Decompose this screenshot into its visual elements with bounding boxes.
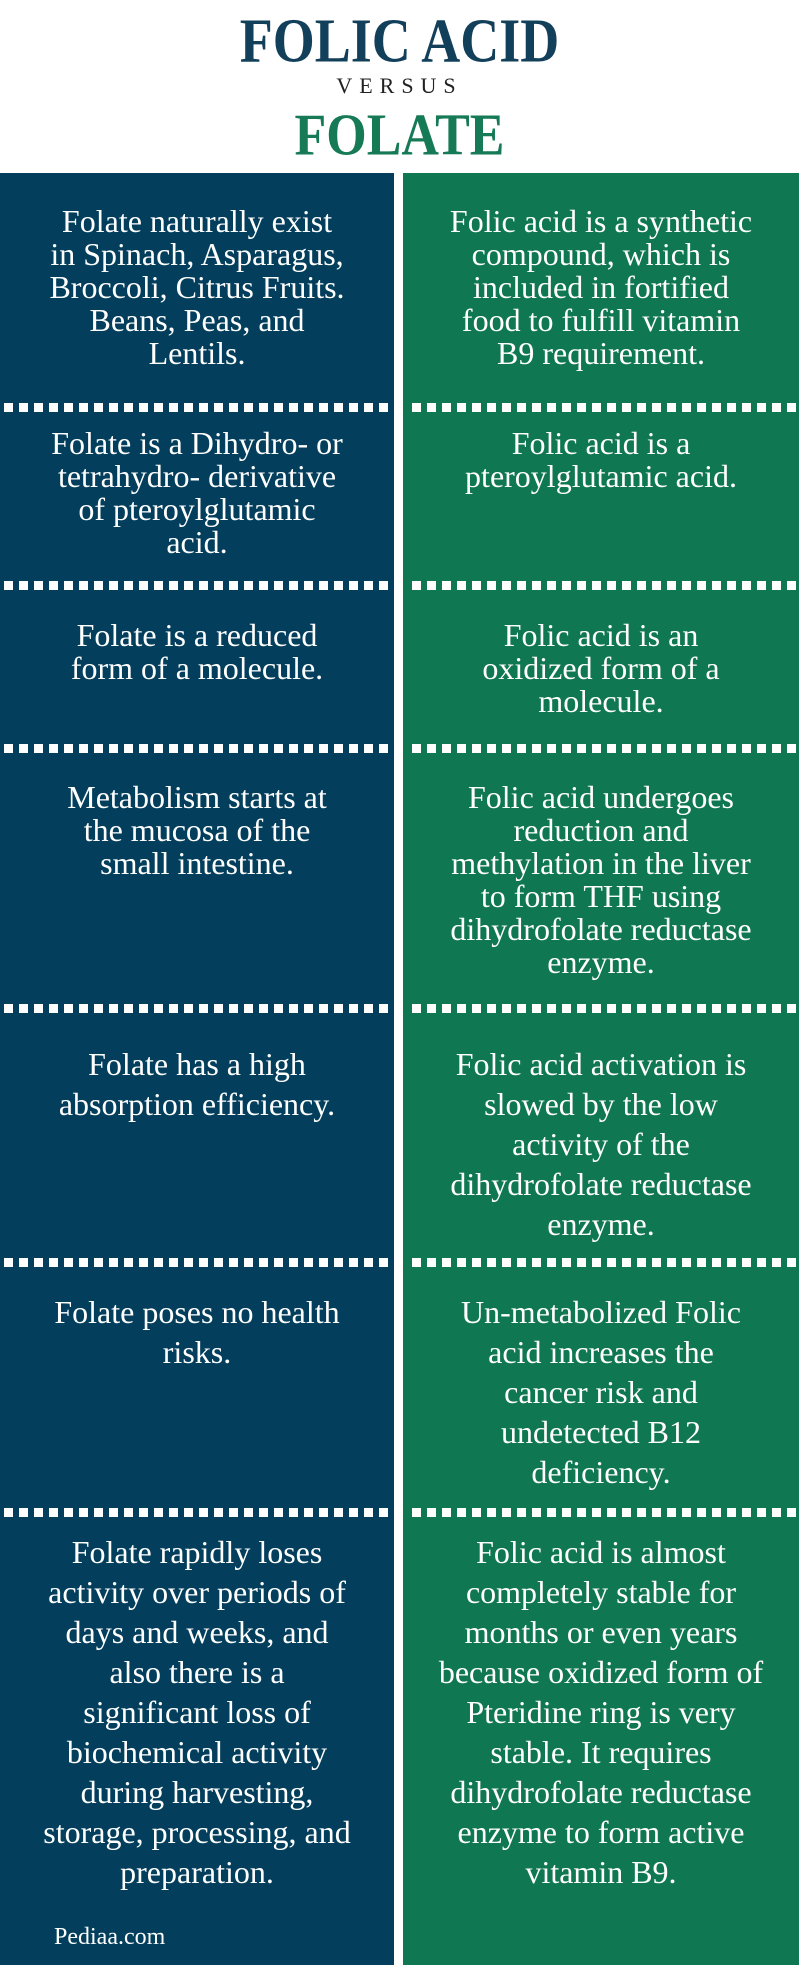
text: row 4 right: dihydrofolate reductase [450, 911, 752, 947]
text: row 1 right: food to fulfill vitamin [462, 302, 740, 338]
title: folate: FOLATE [295, 103, 504, 168]
text: row 1 right [450, 203, 752, 371]
text: row 4 left: Metabolism starts at [67, 779, 327, 815]
text: row 7 right: stable. It requires [490, 1734, 712, 1770]
text: row 7 left: preparation. [120, 1854, 274, 1890]
text: row 6 right: deficiency. [531, 1454, 671, 1490]
text: row 5 right: dihydrofolate reductase [450, 1166, 752, 1202]
text: row 7 right: dihydrofolate reductase [450, 1774, 752, 1810]
text: row 5 right: activity of the [512, 1126, 690, 1162]
text: row 2 left: tetrahydro- derivative [58, 458, 336, 494]
text: row 7 left: storage, processing, and [43, 1814, 351, 1850]
text: row 7 left: activity over periods of [48, 1574, 346, 1610]
text: row 4 left [67, 779, 327, 881]
text: row 1 right: B9 requirement. [497, 335, 705, 371]
text: row 7 left: Folate rapidly loses [72, 1534, 322, 1570]
text: row 7 left [43, 1534, 351, 1890]
text: row 7 right: completely stable for [466, 1574, 736, 1610]
text: row 5 left [59, 1046, 335, 1122]
text: row 4 left: the mucosa of the [84, 812, 310, 848]
text: row 7 left: biochemical activity [67, 1734, 327, 1770]
text: row 3 left: form of a molecule. [71, 650, 323, 686]
text: row 1 left: Beans, Peas, and [89, 302, 305, 338]
text: row 5 right: enzyme. [547, 1206, 655, 1242]
text: row 1 left: Lentils. [149, 335, 245, 371]
text: row 4 right: methylation in the liver [451, 845, 751, 881]
text: row 1 left [49, 203, 345, 371]
text: row 4 right: to form THF using [481, 878, 721, 914]
text: row 3 right: molecule. [538, 683, 664, 719]
text: row 3 right [482, 617, 720, 719]
text: row 4 left: small intestine. [100, 845, 294, 881]
text: row 7 left: also there is a [109, 1654, 285, 1690]
text: row 6 right: Un-metabolized Folic [461, 1294, 741, 1330]
text: row 6 right: undetected B12 [501, 1414, 701, 1450]
text: row 2 right: pteroylglutamic acid. [465, 458, 737, 494]
logo: pediaa.com: Pediaa.com [54, 1924, 165, 1950]
text: row 7 left: significant loss of [83, 1694, 311, 1730]
text: row 5 right [450, 1046, 752, 1242]
text: row 3 right: Folic acid is an [504, 617, 698, 653]
text: row 2 left: Folate is a Dihydro- or [51, 425, 343, 461]
text: row 7 right: because oxidized form of [439, 1654, 763, 1690]
text: row 4 right [450, 779, 752, 980]
text: row 7 right [438, 1534, 764, 1890]
title: folic acid: FOLIC ACID [240, 7, 559, 76]
text: row 6 right: cancer risk and [504, 1374, 698, 1410]
text: row 2 left: of pteroylglutamic [78, 491, 316, 527]
text: row 1 right: included in fortified [473, 269, 729, 305]
text: row 2 left: acid. [166, 524, 228, 560]
text: row 6 left: risks. [163, 1334, 231, 1370]
text: row 3 left: Folate is a reduced [77, 617, 317, 653]
text: row 4 right: enzyme. [547, 944, 655, 980]
text: row 7 right: Pteridine ring is very [466, 1694, 736, 1730]
text: row 6 right [461, 1294, 741, 1490]
panel: folate column [0, 173, 394, 1965]
text: row 6 left: Folate poses no health [54, 1294, 340, 1330]
text: row 5 left: Folate has a high [88, 1046, 306, 1082]
text: row 1 right: compound, which is [472, 236, 730, 272]
text: row 7 left: days and weeks, and [65, 1614, 329, 1650]
text: row 1 left: in Spinach, Asparagus, [50, 236, 344, 272]
text: row 6 right: acid increases the [488, 1334, 714, 1370]
text: row 7 right: months or even years [465, 1614, 737, 1650]
text: row 1 left: Folate naturally exist [62, 203, 332, 239]
text: row 1 left: Broccoli, Citrus Fruits. [49, 269, 345, 305]
text: row 7 right: enzyme to form active [458, 1814, 744, 1850]
text: row 7 right: Folic acid is almost [476, 1534, 726, 1570]
text: row 6 left [54, 1294, 340, 1370]
panel: folic acid column [403, 173, 799, 1965]
text: row 5 right: slowed by the low [484, 1086, 718, 1122]
text: row 2 left [51, 425, 343, 560]
text: row 2 right [465, 425, 737, 494]
text: row 7 right: vitamin B9. [525, 1854, 677, 1890]
text: row 5 left: absorption efficiency. [59, 1086, 335, 1122]
text: row 3 right: oxidized form of a [482, 650, 720, 686]
text: row 1 right: Folic acid is a synthetic [450, 203, 752, 239]
text: row 7 left: during harvesting, [81, 1774, 313, 1810]
text: row 5 right: Folic acid activation is [456, 1046, 746, 1082]
text: row 4 right: Folic acid undergoes [468, 779, 734, 815]
subtitle: versus: VERSUS [336, 73, 463, 98]
text: row 3 left [71, 617, 323, 686]
text: row 2 right: Folic acid is a [512, 425, 690, 461]
text: row 4 right: reduction and [513, 812, 689, 848]
